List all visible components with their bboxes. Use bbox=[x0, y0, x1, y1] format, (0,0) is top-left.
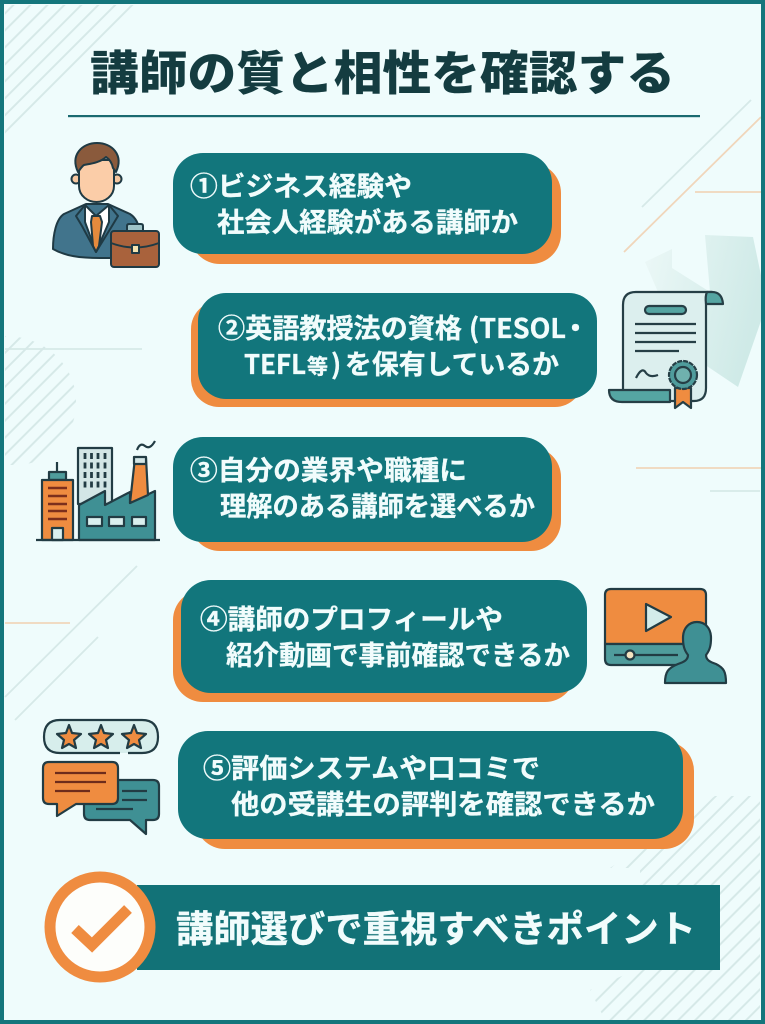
item 4 bbox=[173, 580, 587, 702]
item 1: 社会人経験がある講師か bbox=[217, 207, 518, 238]
item 5: 他の受講生の評判を確認できるか bbox=[231, 790, 655, 820]
item 1: ①ビジネス経験や bbox=[190, 172, 412, 202]
footer banner: 講師選びで重視すべきポイント bbox=[176, 909, 696, 950]
item 3: ③自分の業界や職種に bbox=[190, 456, 467, 486]
icon: check mark bbox=[50, 877, 150, 977]
item 1 bbox=[173, 153, 561, 264]
title: 講師の質と相性を確認する bbox=[90, 35, 675, 104]
item 2: (TESOL bbox=[469, 307, 566, 346]
item 5 bbox=[178, 731, 694, 849]
item 5: ⑤評価システムや口コミで bbox=[203, 754, 540, 784]
item 3: 理解のある講師を選べるか bbox=[220, 492, 535, 522]
item 2 bbox=[191, 293, 597, 407]
item 2: 等 bbox=[307, 351, 328, 381]
icon: certificate bbox=[609, 292, 723, 408]
item 2: ) bbox=[331, 343, 341, 382]
item 4: ④講師のプロフィールや bbox=[200, 605, 503, 635]
item 2: ・ bbox=[562, 307, 589, 346]
icon: businessman with briefcase bbox=[53, 143, 159, 267]
footer banner bbox=[137, 885, 720, 970]
item 2: ②英語教授法の資格 bbox=[218, 314, 462, 344]
icon: buildings and factory bbox=[36, 441, 160, 540]
icon: star rating and speech bubbles bbox=[43, 720, 159, 834]
item 4: 紹介動画で事前確認できるか bbox=[226, 641, 570, 671]
icon: video with person bbox=[605, 589, 726, 683]
item 2: TEFL bbox=[244, 343, 306, 382]
item 2: を保有しているか bbox=[345, 350, 559, 380]
item 3 bbox=[173, 437, 561, 551]
